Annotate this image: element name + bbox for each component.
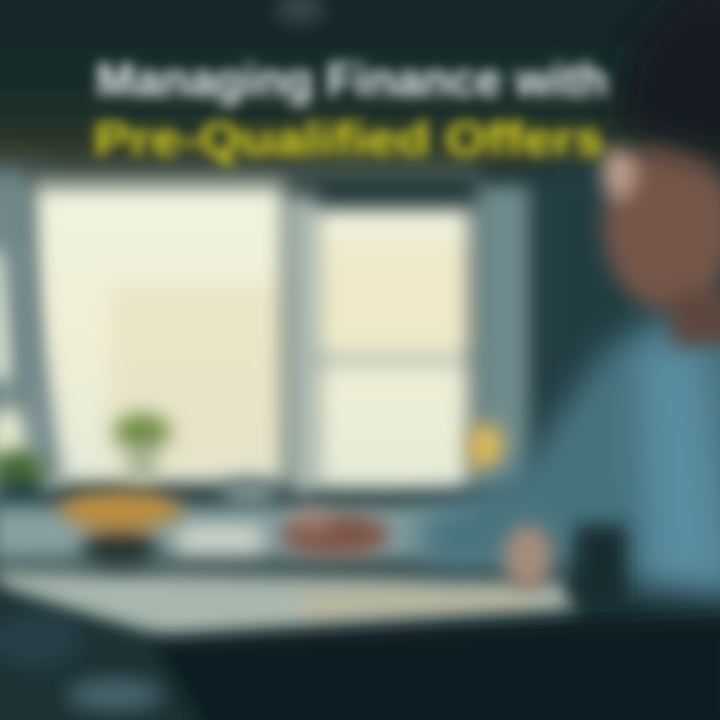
diagonal window frame left [0, 175, 62, 490]
hair / cap [615, 0, 720, 165]
plants and objects on sill [0, 414, 504, 530]
title [94, 53, 608, 165]
ceiling header band [0, 0, 720, 165]
curtain right of window and left wall [0, 165, 720, 500]
hand [280, 510, 390, 557]
arm and torso [410, 310, 720, 600]
title line 2: Pre-Qualified Offers [94, 112, 604, 165]
dark foreground [0, 580, 720, 720]
desk [0, 505, 580, 640]
face and neck [602, 140, 720, 345]
person [280, 0, 720, 605]
window panes [0, 165, 530, 495]
foreground figure at desk [504, 524, 627, 605]
bowl with fruit [58, 492, 182, 566]
title line 1: Managing Finance with [96, 53, 608, 106]
